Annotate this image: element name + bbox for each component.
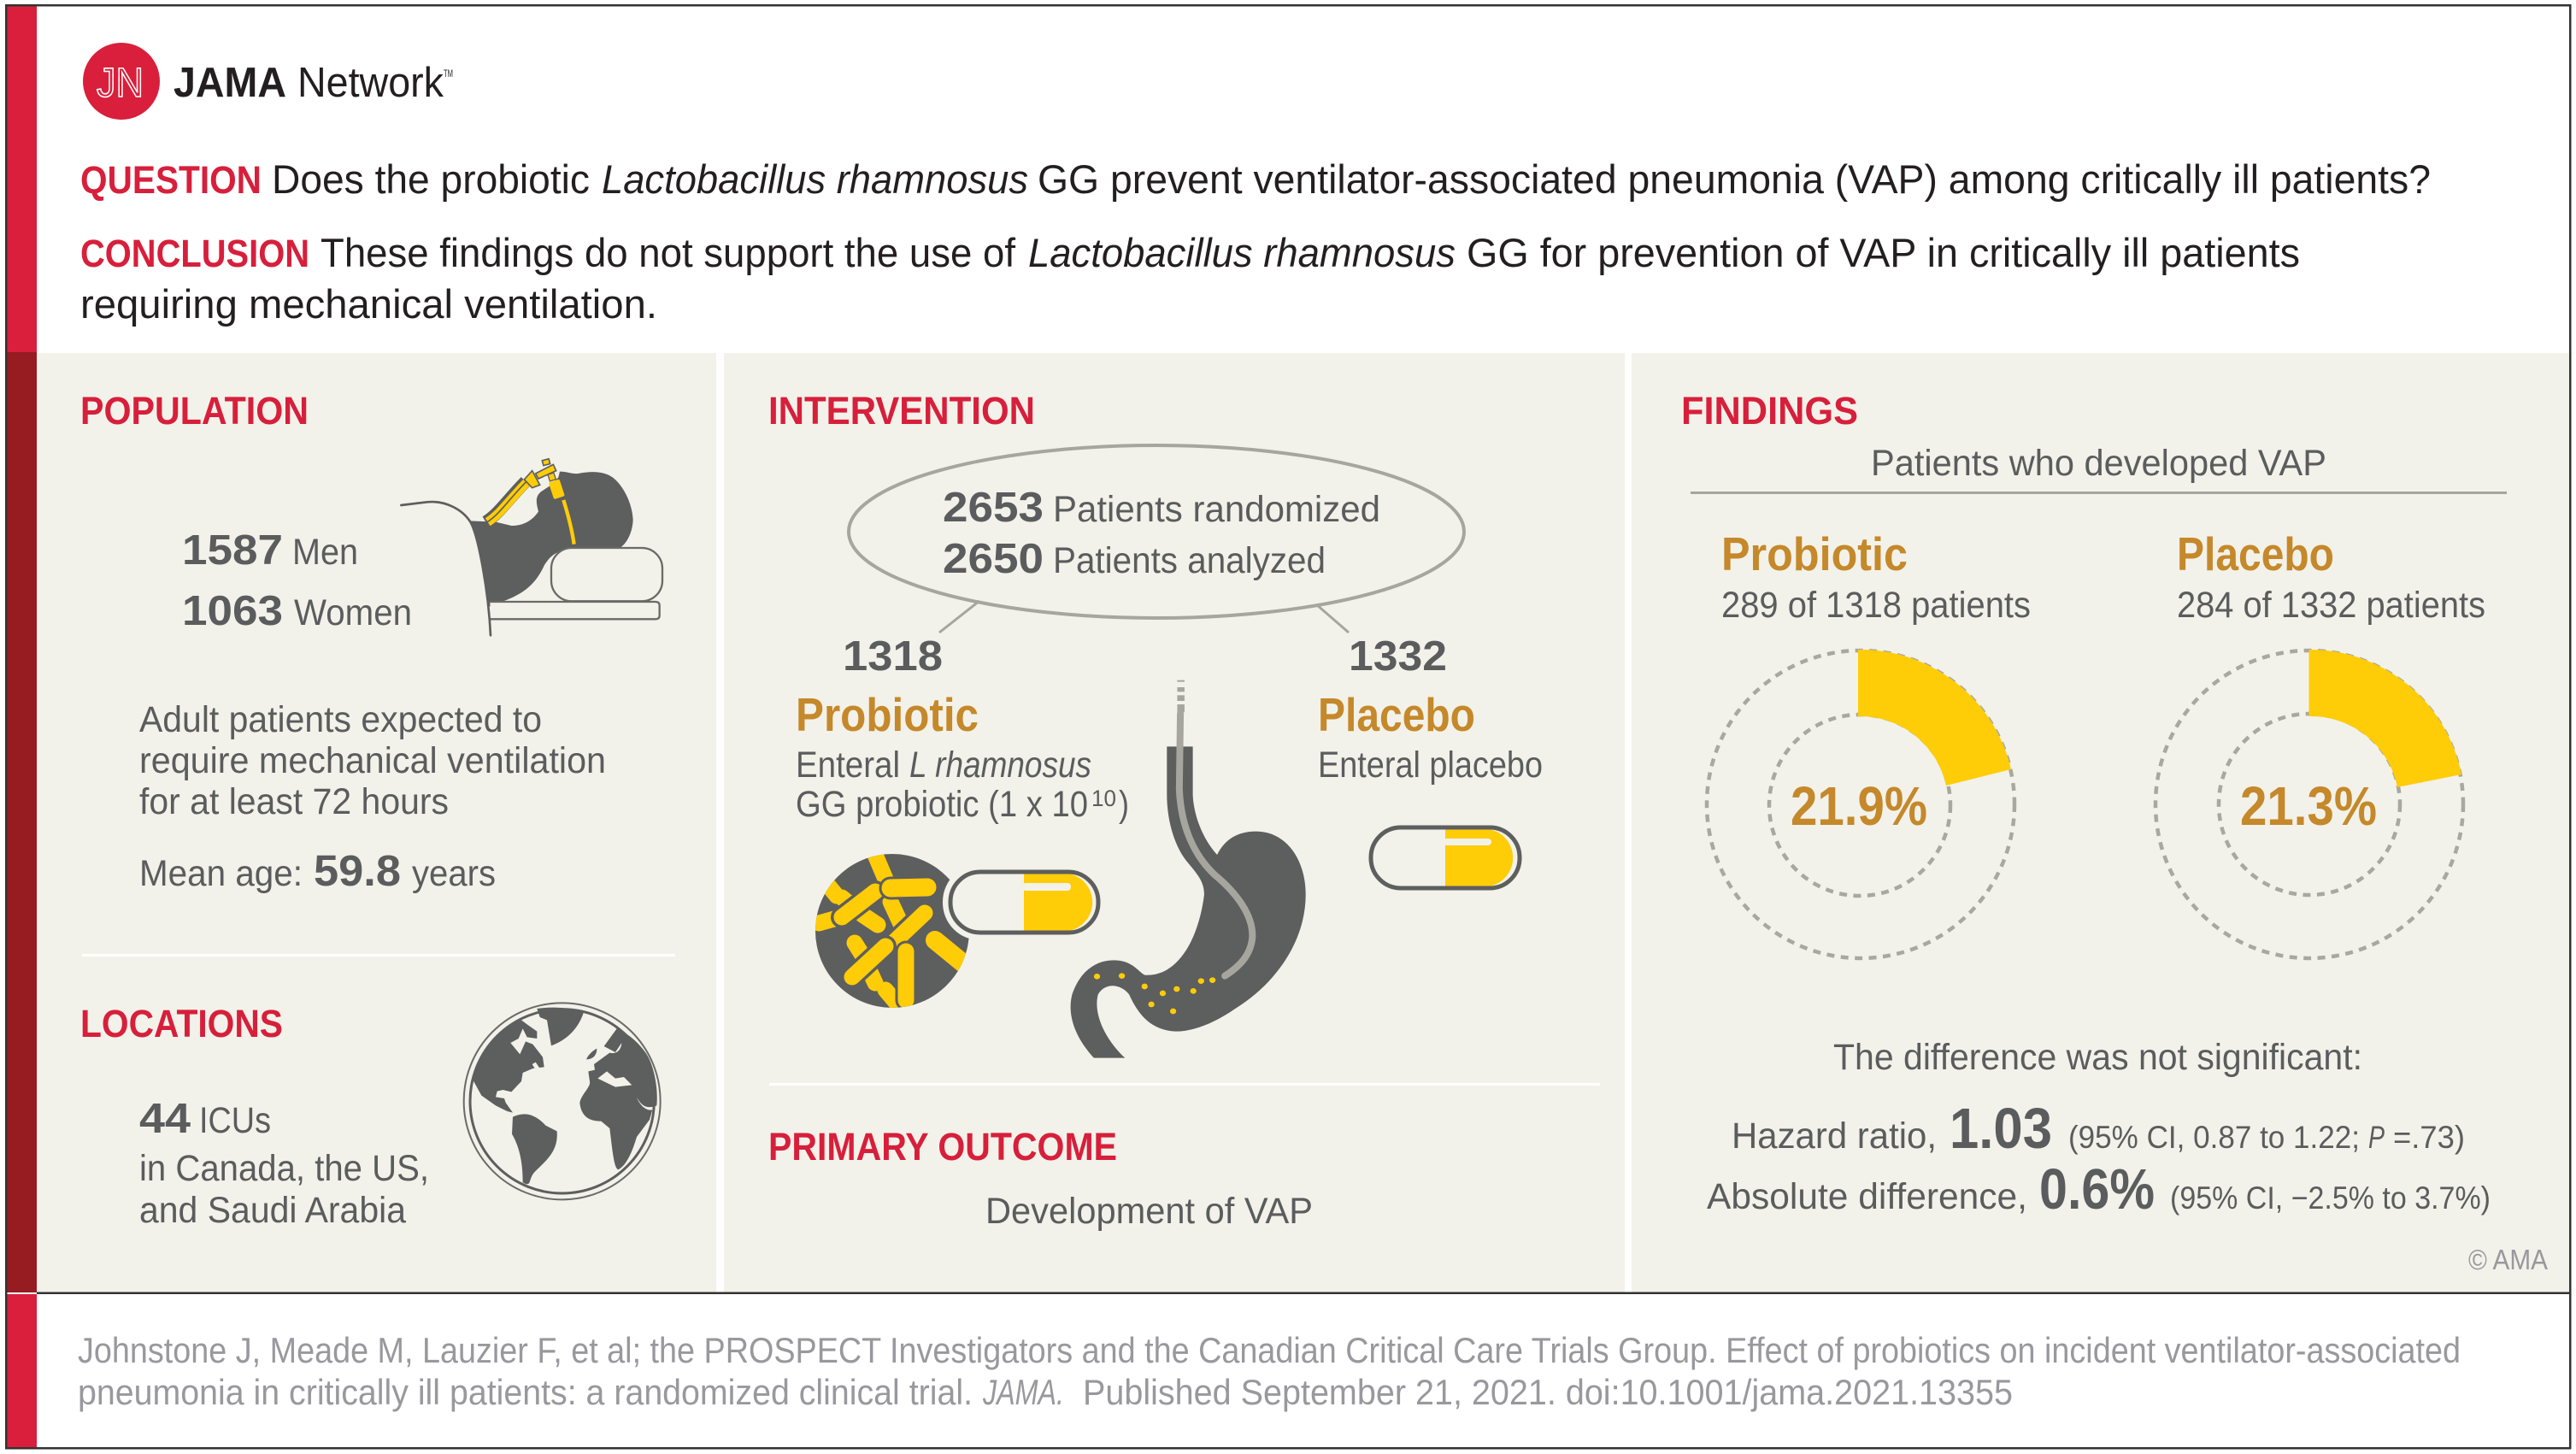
panel: intervention background: [724, 353, 1625, 1292]
absolute difference: 0.6%: [2039, 1157, 2155, 1221]
conclusion: CONCLUSION: [80, 232, 309, 275]
heading: intervention: INTERVENTION: [768, 389, 1035, 433]
hazard ratio: Hazard ratio,: [1732, 1116, 1937, 1157]
arm label: placebo: Enteral placebo: [1318, 745, 1543, 786]
citation: Published September 21, 2021. doi:10.1001/jama.2021.13355: [1083, 1372, 2013, 1412]
mean age: [139, 846, 496, 895]
probiotic result label: 289 of 1318 patients: [1721, 585, 2031, 626]
conclusion: GG for prevention of VAP in critically ill patients: [1467, 230, 2300, 275]
logo: JAMA Network: [83, 43, 453, 120]
arm label: probiotic: Probiotic: [796, 688, 979, 741]
arm label: probiotic: ): [1119, 784, 1129, 825]
placebo result label: Placebo: [2177, 527, 2334, 580]
arm count: placebo: 1332: [1349, 633, 1447, 680]
panel: findings background: [1632, 353, 2569, 1292]
population description: Adult patients expected to: [139, 699, 542, 740]
heading: locations: LOCATIONS: [80, 1002, 283, 1045]
connector: right: [1316, 604, 1349, 633]
absolute difference: (95% CI, −2.5% to 3.7%): [2170, 1180, 2491, 1216]
arm label: probiotic: 10: [1091, 786, 1116, 811]
locations text: [139, 1096, 429, 1231]
probiotic result label: [1721, 527, 2031, 626]
mean age: Mean age:: [139, 853, 303, 894]
ellipse: randomized and analyzed counts: 2650: [943, 536, 1044, 582]
conclusion: These findings do not support the use of: [321, 230, 1016, 275]
hazard ratio: 1.03: [1950, 1097, 2052, 1161]
donut chart: probiotic 21.9%: [1707, 650, 2014, 958]
arm count: probiotic: 1318: [843, 633, 943, 680]
conclusion: Lactobacillus rhamnosus: [1028, 230, 1456, 275]
donut chart: placebo 21.3%: [2155, 650, 2463, 958]
icon: globe: [464, 1003, 661, 1199]
conclusion: [80, 230, 2300, 327]
hazard ratio: (95% CI, 0.87 to 1.22;: [2068, 1120, 2360, 1155]
citation: pneumonia in critically ill patients: a randomized clinical trial.: [78, 1372, 973, 1412]
arm label: probiotic: L rhamnosus: [909, 745, 1091, 786]
heading: population: POPULATION: [80, 389, 309, 433]
locations text: in Canada, the US,: [139, 1148, 429, 1189]
significance statement: The difference was not significant:: [1833, 1037, 2362, 1078]
population counts: Men: [292, 532, 358, 573]
findings subtitle: Patients who developed VAP: [1871, 443, 2326, 484]
arm label: probiotic: [796, 688, 1129, 825]
icon: probiotic capsule: [950, 872, 1098, 933]
arm label: probiotic: GG probiotic (1 x 10: [796, 784, 1088, 825]
left colour band: [7, 6, 37, 1448]
arm label: probiotic: Enteral: [796, 745, 900, 786]
locations text: 44: [139, 1096, 191, 1142]
ellipse: randomized and analyzed counts: Patients analyzed: [1053, 540, 1326, 581]
hazard ratio: =.73): [2393, 1120, 2465, 1155]
question: [80, 156, 2431, 202]
question: Does the probiotic: [272, 156, 590, 202]
icon: ventilated patient: [401, 459, 662, 635]
icon: placebo capsule: [1371, 827, 1520, 888]
absolute difference: Absolute difference,: [1707, 1176, 2027, 1217]
icon: bacteria circle: [815, 854, 969, 1008]
connector: left: [939, 601, 979, 633]
primary outcome text: Development of VAP: [985, 1191, 1313, 1232]
hazard ratio: P: [2368, 1120, 2385, 1155]
findings subtitle: [1691, 443, 2507, 494]
placebo result label: 284 of 1332 patients: [2177, 585, 2485, 626]
population counts: [182, 527, 412, 634]
icon: stomach with feeding tube: [1071, 680, 1306, 1058]
population description: for at least 72 hours: [139, 781, 449, 822]
ellipse: randomized and analyzed counts: [849, 445, 1464, 618]
donut chart: placebo 21.3%: 21.3%: [2240, 775, 2377, 837]
logo: JAMA Network: TM: [444, 68, 453, 79]
population counts: 1587: [182, 527, 283, 574]
logo: JAMA Network: JN: [97, 61, 144, 106]
copyright: © AMA: [2468, 1244, 2548, 1275]
ellipse: randomized and analyzed counts: Patients randomized: [1053, 489, 1380, 530]
locations text: ICUs: [199, 1100, 271, 1141]
citation: [78, 1330, 2461, 1412]
arm label: placebo: [1318, 688, 1543, 786]
probiotic result label: Probiotic: [1721, 527, 1908, 580]
hazard ratio: [1732, 1097, 2465, 1161]
population counts: 1063: [182, 588, 283, 634]
absolute difference: [1707, 1157, 2491, 1221]
question: QUESTION: [80, 158, 262, 202]
logo: JAMA Network: Network: [297, 60, 444, 106]
population description: require mechanical ventilation: [139, 740, 606, 781]
mean age: 59.8: [314, 846, 401, 895]
donut chart: probiotic 21.9%: 21.9%: [1791, 775, 1927, 837]
question: GG prevent ventilator-associated pneumonia (VAP) among critically ill patients?: [1038, 156, 2431, 202]
citation: JAMA.: [982, 1372, 1064, 1412]
question: Lactobacillus rhamnosus: [602, 156, 1028, 202]
logo: JAMA Network: JAMA: [173, 60, 286, 106]
arm label: placebo: Placebo: [1318, 688, 1475, 741]
ellipse: randomized and analyzed counts: 2653: [943, 485, 1044, 531]
placebo result label: [2177, 527, 2485, 626]
population description: [139, 699, 606, 822]
mean age: years: [412, 853, 496, 894]
conclusion: requiring mechanical ventilation.: [80, 281, 657, 327]
panel: population and locations background: [37, 353, 716, 1292]
heading: findings: FINDINGS: [1681, 389, 1858, 433]
population counts: Women: [294, 592, 412, 633]
locations text: and Saudi Arabia: [139, 1190, 406, 1231]
heading: primary outcome: PRIMARY OUTCOME: [768, 1125, 1117, 1168]
